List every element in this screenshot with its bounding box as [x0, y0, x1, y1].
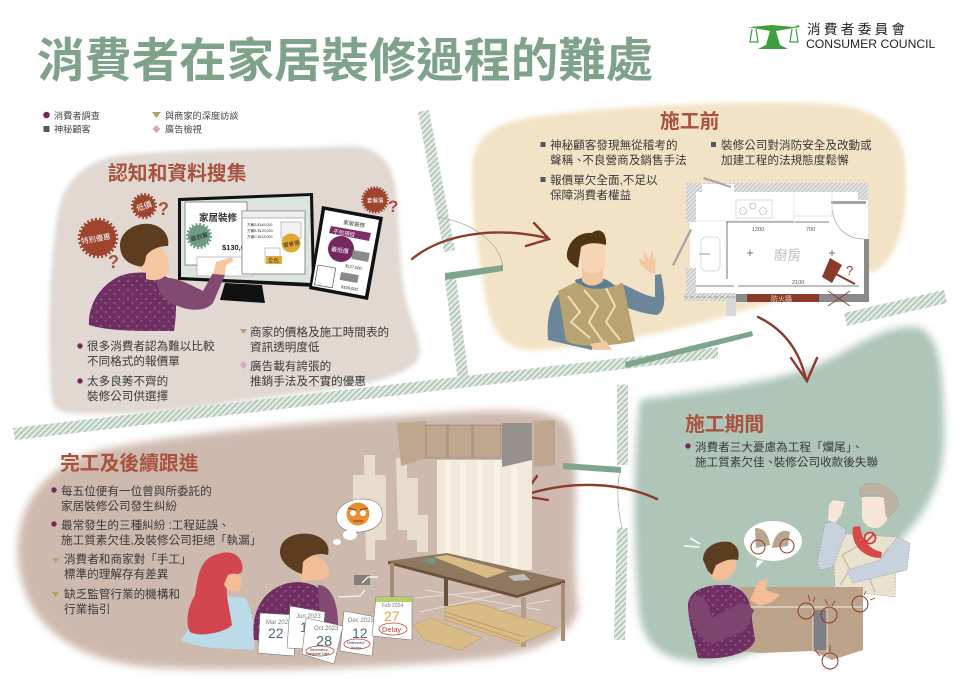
arrow: before construction to during construction	[758, 317, 817, 381]
text: merchant and advert bullets: 廣告載有誇張的	[250, 359, 331, 373]
calendars: delay dates: Dec 2023	[348, 618, 374, 624]
heading: completion: 完工及後續跟進	[60, 452, 199, 475]
icon: price tags with question marks: 低價	[135, 199, 153, 213]
calendars: delay dates: Renovation	[310, 648, 328, 652]
heading: before construction: 施工前	[660, 111, 719, 133]
text: mystery shopper bullets	[540, 138, 872, 202]
panel: before construction	[540, 111, 872, 350]
icon: price tags with question marks: ?	[158, 199, 169, 219]
hatched walls of the floor plan	[13, 110, 947, 640]
illustration: contractor with OK gesture	[548, 231, 664, 350]
calendars: delay dates: 12	[352, 625, 368, 641]
illustration: workbench with tools	[388, 553, 565, 650]
icon: price tags with question marks	[80, 188, 398, 272]
text: merchant and advert bullets: 推銷手法及不實的優惠	[250, 374, 366, 388]
illustration: kitchen floor plan: 2100	[792, 280, 804, 286]
illustration: tablet: 最低價	[331, 245, 349, 255]
logo: Consumer Council: 消費者委員會	[807, 22, 908, 37]
illustration: tablet: 家居裝修	[343, 218, 366, 229]
legend: 廣告檢視	[165, 124, 202, 134]
text: dispute bullets: 標準的理解存有差異	[64, 567, 168, 581]
illustration: monitor: 全包	[268, 256, 280, 264]
calendars: delay dates: Jun 2023	[296, 614, 321, 620]
calendars: delay dates: Works	[351, 646, 361, 650]
heading: awareness: 認知和資料搜集	[108, 162, 246, 185]
text: merchant and advert bullets: 商家的價格及施工時間表的	[250, 325, 389, 339]
calendars: delay dates: 18	[300, 619, 316, 635]
illustration: kitchen floor plan: 1200	[752, 227, 764, 233]
calendars: delay dates: 22	[268, 625, 284, 641]
logo: Consumer Council	[748, 22, 936, 51]
text: merchant and advert bullets	[240, 325, 389, 388]
illustration: monitor: $130,0	[222, 243, 245, 252]
text: consumer bullets	[77, 339, 215, 403]
illustration: kitchen floor plan: 防火牆	[771, 294, 792, 303]
text: dispute bullets: 消費者和商家對「手工」	[64, 552, 192, 566]
illustration: monitor: 方案A $148,000	[247, 222, 272, 227]
illustration: monitor	[178, 193, 315, 303]
illustration: tablet: $109,000	[341, 284, 359, 292]
illustration: consumer at monitor	[89, 224, 233, 331]
calendars: delay dates: Delay	[382, 625, 401, 634]
illustration: unfinished room	[338, 420, 555, 620]
text: mystery shopper bullets: 裝修公司對消防安全及改動或	[721, 138, 872, 152]
text: dispute bullets	[51, 484, 261, 616]
text: merchant and advert bullets: 資訊透明度低	[250, 340, 320, 354]
legend	[43, 110, 239, 134]
icon: price tags with question marks: 特別優惠	[81, 232, 111, 246]
calendars: delay dates: Feb 2024	[382, 603, 403, 609]
illustration: monitor: 方案C $118,000	[247, 234, 273, 239]
calendars: delay dates	[258, 597, 412, 664]
text: mystery shopper bullets: 保障消費者權益	[550, 188, 632, 202]
thought bubble: angry face	[333, 499, 382, 545]
illustration: monitor: 實餐價	[283, 238, 301, 249]
calendars: delay dates: Unfinished	[347, 641, 364, 645]
text: consumer bullets: 很多消費者認為難以比較	[87, 339, 215, 353]
calendars: delay dates: Complete Date	[306, 652, 329, 656]
legend: 消費者調查	[54, 110, 100, 121]
text: consumer bullets: 裝修公司供選擇	[87, 389, 169, 403]
calendars: delay dates: Oct 2023	[314, 626, 339, 632]
text: dispute bullets: 缺乏監管行業的機構和	[64, 587, 180, 601]
illustration: couple from behind	[181, 534, 338, 650]
text: consumer bullets: 不同格式的報價單	[87, 354, 180, 368]
text: three worries	[685, 440, 878, 469]
heading: during construction: 施工期間	[685, 414, 764, 436]
text: three worries: 消費者三大憂慮為工程「爛尾」、	[695, 440, 863, 454]
legend: 神秘顧客	[54, 124, 91, 134]
illustration: defective cabinet box	[740, 587, 875, 669]
panel: awareness and information search	[77, 162, 398, 403]
panel: completion and follow-up	[51, 420, 565, 664]
text: dispute bullets: 行業指引	[64, 602, 110, 616]
illustration: kitchen floor plan: 700	[806, 227, 815, 233]
illustration: kitchen floor plan: ?	[846, 263, 853, 278]
arrow: search to before construction	[412, 223, 549, 259]
calendars: delay dates: Mar 2023	[266, 620, 292, 626]
text: three worries: 施工質素欠佳、裝修公司收款後失聯	[695, 455, 878, 469]
title: 消費者在家居裝修過程的難處	[37, 35, 653, 88]
text: mystery shopper bullets: 神秘顧客發現無從稽考的	[550, 138, 678, 152]
illustration: monitor: 最划算	[190, 231, 209, 243]
illustration: kitchen floor plan	[672, 177, 869, 316]
text: consumer bullets: 太多良莠不齊的	[87, 374, 168, 388]
illustration: tablet	[309, 206, 383, 300]
illustration: monitor: 家居裝修	[199, 212, 238, 224]
illustration: kitchen floor plan: 廚房	[774, 247, 801, 263]
text: mystery shopper bullets: 報價單欠全面,不足以	[550, 173, 658, 187]
illustration: unresponsive contractor	[817, 483, 910, 597]
icon: price tags with question marks: 套餐價	[367, 196, 384, 204]
legend: 與商家的深度訪談	[165, 110, 238, 121]
calendars: delay dates: 28	[316, 634, 332, 650]
text: dispute bullets: 每五位便有一位曾與所委託的	[61, 484, 212, 498]
illustration: monitor: 方案B $120,000	[247, 228, 273, 233]
illustration: tablet: $127,000	[345, 263, 363, 271]
text: mystery shopper bullets: 聲稱、不良營商及銷售手法	[550, 153, 687, 167]
text: dispute bullets: 家居裝修公司發生糾紛	[61, 499, 177, 513]
panel: during construction	[684, 414, 910, 669]
icon: price tags with question marks: ?	[388, 197, 398, 216]
illustration: worried consumer	[684, 538, 780, 658]
arrow: during construction to completion	[523, 476, 657, 500]
text: mystery shopper bullets: 加建工程的法規態度鬆懈	[721, 153, 849, 167]
icon: price tags with question marks: ?	[108, 252, 119, 272]
logo: Consumer Council: CONSUMER COUNCIL	[806, 37, 936, 51]
illustration: tablet: 不包項目	[333, 227, 356, 239]
text: dispute bullets: 最常發生的三種糾紛 :工程延誤、	[61, 518, 230, 532]
text: dispute bullets: 施工質素欠佳,及裝修公司拒絕「執漏」	[61, 533, 261, 547]
calendars: delay dates: 27	[384, 608, 400, 624]
speech bubble: defects	[744, 521, 802, 568]
